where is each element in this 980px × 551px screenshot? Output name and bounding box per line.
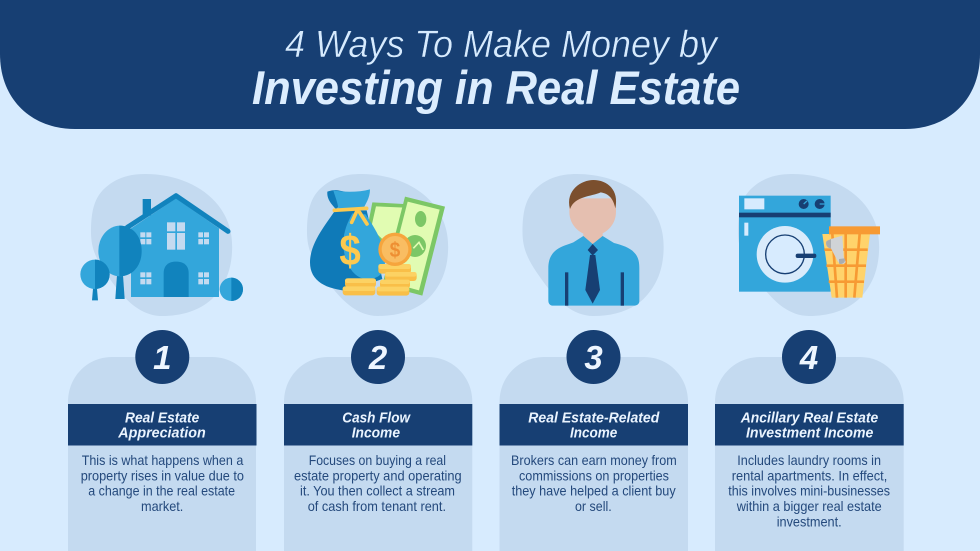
heading band: Ancillary Real Estate	[740, 410, 878, 426]
description: property rises in value due to	[81, 468, 244, 483]
heading band	[284, 404, 472, 446]
heading band	[500, 404, 688, 446]
number badge: 1	[153, 339, 171, 376]
icon: businessman	[522, 174, 664, 316]
card 1: Real Estate Appreciation	[68, 330, 256, 551]
heading band	[715, 404, 904, 446]
card 4: Ancillary Real Estate Investment Income	[715, 330, 904, 551]
number badge	[135, 330, 189, 384]
card 2: Cash Flow Income	[284, 330, 472, 551]
icon: money bag, cash and coins: $	[390, 238, 400, 262]
icon: house	[80, 174, 243, 316]
heading band: Real Estate	[125, 410, 199, 426]
number badge: 3	[584, 339, 603, 376]
description: rental apartments. In effect,	[732, 468, 887, 483]
description: of cash from tenant rent.	[308, 499, 446, 514]
icon: money bag, cash and coins: $	[339, 227, 361, 276]
icon: money bag, cash and coins	[307, 174, 448, 316]
heading band: Income	[352, 424, 400, 442]
description: commissions on properties	[519, 468, 669, 483]
description: they have helped a client buy	[512, 484, 676, 499]
heading band: Appreciation	[117, 424, 206, 442]
title line 1: 4 Ways To Make Money by	[285, 24, 719, 66]
number badge: 2	[368, 339, 388, 376]
description: estate property and operating	[294, 468, 462, 483]
number badge: 4	[799, 339, 818, 376]
description: This is what happens when a	[82, 453, 244, 468]
description: Includes laundry rooms in	[737, 453, 881, 468]
description: market.	[141, 499, 183, 514]
description: within a bigger real estate	[736, 499, 882, 514]
icon: washing machine and laundry basket	[738, 174, 880, 316]
heading band: Cash Flow	[342, 410, 411, 426]
heading band	[68, 404, 256, 446]
description	[511, 453, 677, 514]
description: or sell.	[575, 499, 612, 514]
description	[728, 453, 890, 530]
number badge	[351, 330, 405, 384]
heading band: Income	[570, 424, 617, 442]
title line 2: Investing in Real Estate	[252, 61, 740, 114]
description: a change in the real estate	[88, 484, 235, 499]
heading band: Investment Income	[746, 424, 873, 442]
description: investment.	[777, 515, 842, 530]
card 3: Real Estate-Related Income	[500, 330, 688, 551]
description: Brokers can earn money from	[511, 453, 677, 468]
description	[294, 453, 462, 514]
number badge	[566, 330, 620, 384]
description: it. You then collect a stream	[300, 484, 455, 499]
description	[81, 453, 244, 514]
description: Focuses on buying a real	[309, 453, 446, 468]
description: this involves mini-businesses	[728, 484, 890, 499]
heading band: Real Estate-Related	[528, 410, 660, 426]
header banner with title	[0, 0, 980, 129]
number badge	[782, 330, 836, 384]
